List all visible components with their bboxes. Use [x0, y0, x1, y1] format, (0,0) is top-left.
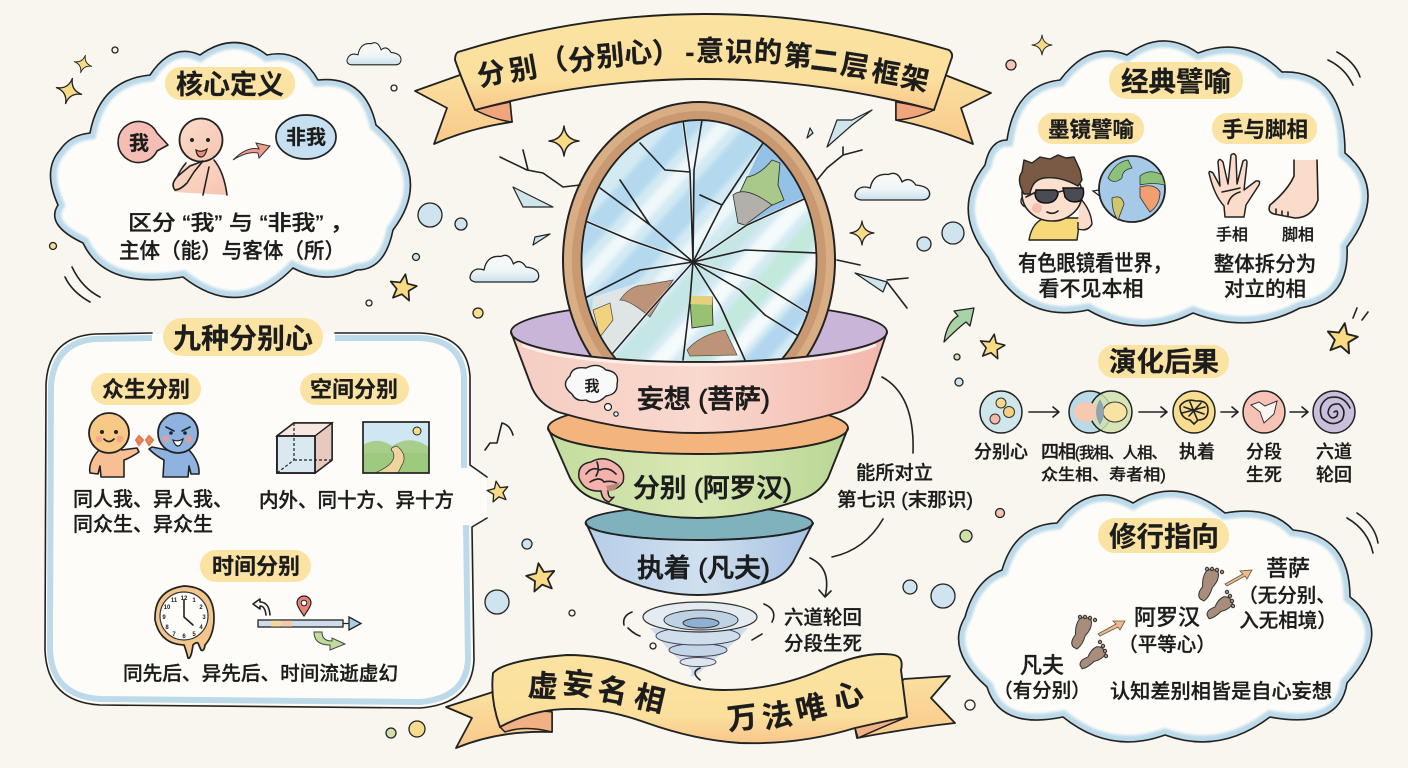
ribbon body [492, 654, 907, 743]
heading: 九种分别心: 九种分别心 [173, 323, 313, 354]
decorative clouds [347, 43, 930, 282]
text: hand and foot analogy: 对立的相 [1224, 278, 1306, 301]
ribbon left tail [415, 75, 512, 144]
text: 众生分别 items: 同众生、异众生 [73, 513, 213, 536]
labels: evolution steps: 众生相、寿者相) [1041, 466, 1166, 484]
panel: 修行指向 [959, 491, 1372, 742]
icon: hand [1209, 154, 1260, 217]
annotation: 能所对立 第七识: 能所对立 [856, 462, 933, 484]
icon: landscape picture [363, 422, 429, 473]
ribbon right fold [896, 102, 934, 120]
annotation: 能所对立 第七识: 第七识 (末那识) [837, 489, 973, 511]
funnel layer: 妄想（菩萨）: 妄想 (菩萨) [637, 384, 770, 414]
panel: 九种分别心 [45, 318, 487, 708]
motto: 虚妄名相: 虚妄名相 [527, 667, 668, 719]
decorative bubbles [50, 47, 1016, 738]
label: 脚相: 脚相 [1282, 226, 1314, 244]
text: 菩萨: 菩萨 [1266, 556, 1310, 581]
map shards [748, 144, 804, 224]
labels: evolution steps: 分别心 [974, 442, 1028, 462]
arrow: green curved [944, 308, 974, 342]
section: 演化后果 [974, 345, 1355, 485]
arrow [1029, 407, 1059, 417]
text: hand and foot analogy: 整体拆分为 [1214, 253, 1316, 276]
ribbon body [455, 14, 952, 110]
funnel layer: 分别（阿罗汉） [548, 402, 848, 518]
icon: foot [1269, 160, 1318, 218]
icon: person pointing at self [173, 118, 227, 195]
icon: timeline with pin and arrows [253, 596, 361, 650]
text: 凡夫: （有分别） [993, 680, 1091, 702]
arrow: self to other [233, 143, 270, 160]
arrow: 阿罗汉 to 菩萨 [1225, 570, 1252, 586]
icon: two arguing people [89, 413, 199, 477]
heading: 经典譬喻: 经典譬喻 [1121, 66, 1231, 97]
icon: 我 speech bubble: 我 [129, 132, 149, 155]
text: sunglasses analogy [1018, 251, 1172, 301]
icon: 分段生死 fragments [1243, 391, 1285, 433]
labels: evolution steps: 六道 [1316, 442, 1352, 462]
arrow [1139, 407, 1167, 417]
ribbon left fold [475, 102, 512, 122]
heading: 核心定义: 核心定义 [176, 70, 284, 100]
panel: 核心定义 [50, 42, 410, 297]
icon: 分别心 [980, 391, 1022, 433]
bottom ribbon [446, 654, 955, 748]
ribbon left fold [500, 711, 552, 732]
annotation: 六道轮回 分段生死: 分段生死 [784, 633, 862, 655]
icon: melting clock: 9 [162, 615, 166, 621]
sub-section: 时间分别 [200, 550, 311, 582]
decorative swishes and cracks [65, 52, 1378, 553]
ribbon left tail [446, 692, 552, 748]
labels: evolution steps: 轮回 [1316, 465, 1352, 485]
icon: 我 speech bubble [118, 121, 168, 162]
ribbon right tail [855, 676, 955, 738]
funnel layer: 妄想（菩萨） [511, 332, 887, 433]
heading: 修行指向: 修行指向 [1109, 521, 1219, 552]
labels: evolution steps: 四相(我相、人相、 [1041, 442, 1167, 462]
text: conclusion: 认知差别相皆是自心妄想 [1110, 680, 1332, 703]
icon: cube [277, 423, 332, 473]
text: 时间分别 items: 同先后、异先后、时间流逝虚幻 [123, 663, 398, 685]
text: 菩萨: 入无相境） [1239, 610, 1337, 632]
icon: melting clock: 5 [192, 632, 196, 638]
cracks [583, 120, 813, 353]
text: 凡夫 [993, 653, 1091, 702]
icon: melting clock: 2 [199, 605, 203, 611]
icon: boy wearing sunglasses [1019, 155, 1092, 240]
annotation: 能所对立 第七识 [832, 377, 973, 557]
text: definition: 区分 “我” 与 “非我” ， [128, 212, 354, 235]
ribbon right tail [896, 75, 991, 144]
annotation: 六道轮回 分段生死 [784, 607, 862, 655]
icon: earth globe [1093, 156, 1165, 222]
decorative stars [388, 272, 1360, 592]
footprints: lower [1066, 615, 1108, 670]
icon: melting clock: 4 [199, 625, 203, 631]
funnel layer: 执着（凡夫）: 执着 (凡夫) [637, 553, 770, 583]
title text: 分别（分别心）-意识的第二层框架 [474, 36, 932, 97]
icon: melting clock: 11 [171, 598, 178, 604]
text: 菩萨: （无分别、 [1238, 585, 1336, 607]
text: sunglasses analogy: 看不见本相 [1038, 278, 1144, 301]
icon: 非我 bubble: 非我 [286, 126, 326, 149]
footprints: upper [1193, 567, 1235, 620]
icon: melting clock: 12 [181, 596, 188, 602]
broken mirror [562, 101, 836, 361]
icon: melting clock: 1 [192, 598, 196, 604]
mirror glass [582, 120, 816, 361]
sub-section: 手与脚相 [1212, 113, 1317, 144]
funnel layer: 执着（凡夫） [586, 506, 813, 595]
icon: thought cloud 我 [565, 365, 618, 416]
arrow [1221, 407, 1238, 417]
panel: 经典譬喻 [968, 41, 1368, 326]
ribbon right fold [855, 716, 907, 738]
icon: thought cloud 我: 我 [584, 378, 600, 395]
heading: 演化后果: 演化后果 [1109, 346, 1219, 377]
sub-section: 空间分别: 空间分别 [310, 377, 398, 402]
text: 阿罗汉: 阿罗汉 [1134, 605, 1200, 630]
sub-section: 手与脚相: 手与脚相 [1222, 118, 1308, 142]
icon: brain [579, 459, 624, 502]
sub-section: 空间分别 [300, 373, 409, 405]
sub-section: 墨镜譬喻 [1038, 113, 1144, 144]
text: 凡夫: 凡夫 [1020, 653, 1064, 678]
icon: melting clock [155, 586, 214, 658]
funnel layer: 分别（阿罗汉）: 分别 (阿罗汉) [633, 473, 792, 503]
icon: melting clock: 6 [182, 634, 186, 640]
icon: 四相 venn [1069, 391, 1132, 433]
labels: evolution steps [974, 442, 1352, 485]
sub-section: 时间分别: 时间分别 [212, 554, 300, 579]
labels: evolution steps: 分段 [1246, 442, 1282, 462]
text: sunglasses analogy: 有色眼镜看世界， [1018, 251, 1172, 276]
text: 阿罗汉 [1118, 605, 1216, 656]
text: definition: 主体（能）与客体（所） [119, 240, 345, 263]
icon: melting clock: 8 [165, 625, 169, 631]
text: hand and foot analogy [1214, 253, 1316, 301]
label: 手相: 手相 [1216, 226, 1248, 244]
title ribbon [415, 14, 991, 144]
text: 阿罗汉: （平等心） [1118, 634, 1216, 656]
text: 空间分别 items: 内外、同十方、异十方 [259, 489, 454, 512]
labels: evolution steps: 执着 [1179, 442, 1215, 462]
icon: melting clock: 10 [164, 605, 171, 611]
arrow: 凡夫 to 阿罗汉 [1098, 621, 1125, 636]
icon: 执着 knot [1173, 391, 1215, 433]
icon: 非我 bubble [276, 115, 336, 159]
icon: 六道轮回 spiral [1313, 391, 1355, 433]
icon: melting clock: 7 [172, 632, 176, 638]
funnel rim: purple back [511, 302, 887, 362]
annotation: 六道轮回 分段生死: 六道轮回 [784, 607, 862, 629]
text: 众生分别 items [73, 488, 233, 536]
text: 菩萨 [1238, 556, 1337, 632]
sub-section: 墨镜譬喻: 墨镜譬喻 [1048, 117, 1134, 142]
icon: melting clock: 3 [202, 615, 206, 621]
decorative sparkles [53, 35, 1052, 245]
sub-section: 众生分别 [91, 373, 201, 405]
mirror frame [563, 102, 835, 418]
labels: evolution steps: 生死 [1246, 465, 1282, 485]
tornado: 六道轮回 vortex [624, 602, 774, 680]
text: 众生分别 items: 同人我、异人我、 [73, 488, 233, 511]
heading: 经典譬喻 [1109, 62, 1243, 99]
sub-section: 众生分别: 众生分别 [102, 377, 190, 402]
arrow [1290, 407, 1308, 417]
motto: 万法唯心: 万法唯心 [725, 677, 867, 737]
arrow: 执着 to 轮回 [810, 558, 831, 597]
text: definition [119, 212, 354, 263]
